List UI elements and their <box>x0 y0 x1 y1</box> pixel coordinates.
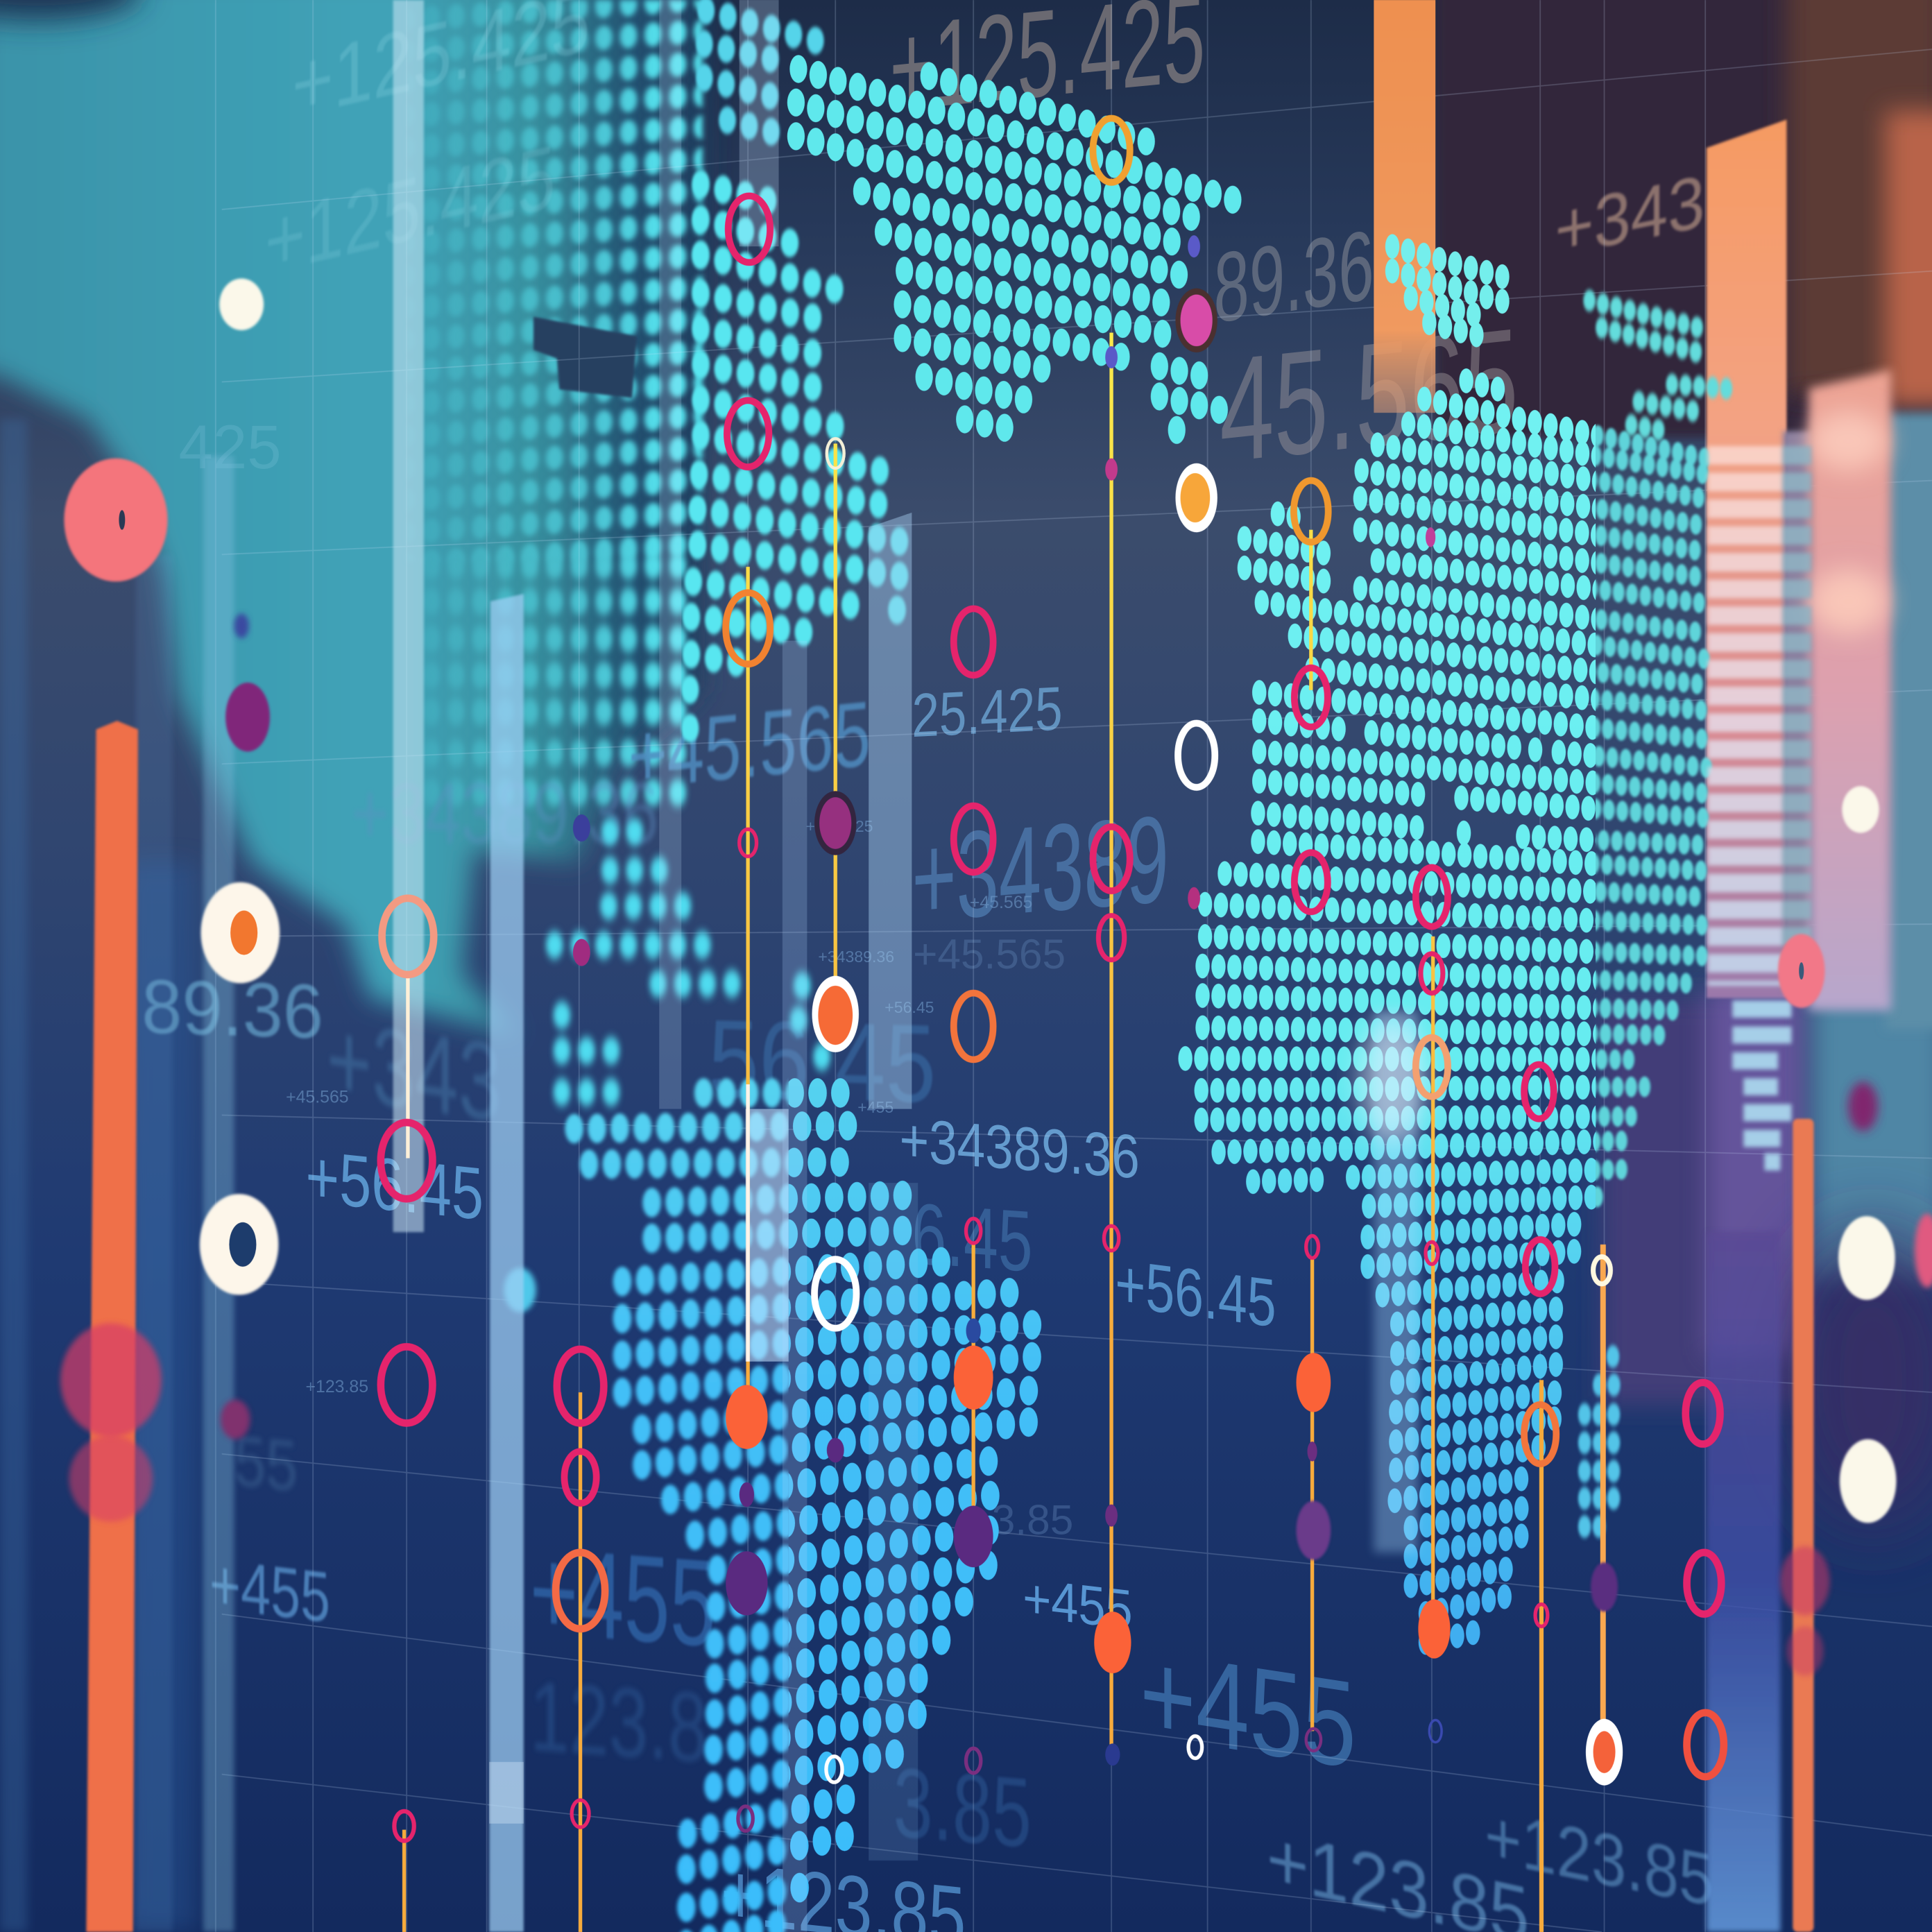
solid purple and magenta nodes <box>221 235 1878 1766</box>
number: 6.45: 6.45 <box>912 1185 1033 1290</box>
number: +455 middle: +455 <box>530 1522 716 1673</box>
white ring markers with filled centres <box>200 438 1623 1786</box>
number: tiny readouts <box>179 413 1073 1543</box>
blurred dot field <box>407 0 702 792</box>
number: 89.36: 89.36 <box>1214 210 1374 344</box>
bar: left orange tall <box>86 721 138 1932</box>
foreground orange bars <box>86 721 1813 1932</box>
number: tiny readouts: 3.85 <box>992 1496 1073 1543</box>
dark gap in the landmass <box>533 316 637 398</box>
yellow connector lines <box>404 333 1603 1932</box>
number: tiny readouts: +56.45 <box>884 998 934 1016</box>
island: lower right <box>1584 1356 1627 1527</box>
number: tiny readouts: +34389.36 <box>818 948 894 966</box>
blurred teal landmass on the left <box>0 0 708 1035</box>
dotted islands <box>1392 246 1737 1527</box>
island: upper right <box>1589 300 1737 431</box>
number: +343 upper right: +343 <box>1555 159 1705 272</box>
number: second upper left blurred: +125.425 <box>265 126 556 293</box>
number: +56.45 centre: +56.45 <box>1115 1245 1276 1342</box>
number: +34389 large: +34389 <box>912 790 1169 948</box>
bar: top right orange <box>1707 119 1786 998</box>
pale stripes where the map crosses the orange bar <box>1732 446 1797 1162</box>
number: +45.565: +45.565 <box>629 681 871 808</box>
number: tiny readouts: +455 <box>857 1098 894 1116</box>
blurred foreground white dots <box>219 278 1896 1523</box>
bar: top centre orange <box>1374 0 1435 413</box>
backing strip beside the orange bar <box>1783 431 1813 992</box>
blurred foreground pink dots <box>60 459 1932 1676</box>
island: upper centre <box>1392 246 1505 335</box>
number: +343 left: +343 <box>327 998 502 1145</box>
number: +34389 blurred left: +34389.36 <box>351 766 659 862</box>
number: 25.425: 25.425 <box>912 674 1063 751</box>
number: tiny readouts: +45.565 <box>913 930 1066 977</box>
number: +34389.36: +34389.36 <box>900 1105 1140 1192</box>
dotted continent: right large <box>1186 381 1707 1643</box>
glow patches on the pale bar <box>1809 411 1888 633</box>
number: +56.45 faded large: 56.45 <box>708 996 936 1126</box>
dotted continent: top <box>704 10 1233 435</box>
number: tiny readouts: +125.425 <box>806 817 873 835</box>
dotted continent: south blue <box>574 1093 1051 1932</box>
number: tiny readouts: +45.565 <box>286 1088 349 1107</box>
number: 55 left: 55 <box>234 1420 298 1506</box>
number: 3.85 faded: 3.85 <box>894 1747 1032 1869</box>
pink ring markers <box>381 196 1721 1841</box>
number: 89.36 left: 89.36 <box>142 964 323 1054</box>
bar: far right pale <box>1809 370 1891 1010</box>
number: 45.565: 45.565 <box>1220 297 1519 494</box>
number: +455 left: +455 <box>210 1544 330 1638</box>
number: tiny readouts: 425 <box>179 413 282 481</box>
number: 123.8 faded: 123.8 <box>530 1661 708 1784</box>
number: +455 large: +455 <box>1140 1623 1356 1795</box>
dotted continent: lower left link <box>504 832 823 1313</box>
orange vertical bars behind the map <box>1374 0 1891 1010</box>
number: +123.85 bottom right: +123.85 <box>1485 1795 1713 1922</box>
number: tiny readouts: +123.85 <box>305 1377 368 1396</box>
bar: right orange thin <box>1793 1119 1813 1932</box>
number: tiny readouts: +45.565 <box>970 893 1032 912</box>
number: +56.45 left: +56.45 <box>305 1135 484 1236</box>
number: +455 small: +455 <box>1023 1566 1133 1641</box>
solid orange nodes <box>726 1346 1451 1673</box>
dotted continent: middle left <box>690 184 921 728</box>
orange ring markers <box>382 119 1724 1777</box>
